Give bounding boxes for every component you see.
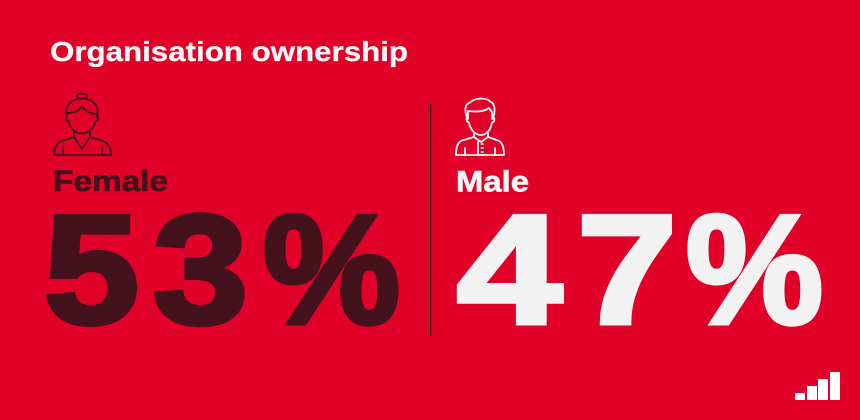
label: male: Male bbox=[456, 166, 529, 198]
value: 47%: % bbox=[686, 183, 823, 356]
label: female: Female bbox=[53, 165, 168, 198]
icon: male person bbox=[456, 99, 504, 155]
value: 47%: 4 bbox=[457, 183, 562, 356]
icon: logo bars bbox=[795, 372, 840, 400]
panel: female bbox=[44, 94, 400, 356]
icon: female person bbox=[54, 94, 111, 155]
title: Organisation ownership bbox=[50, 36, 408, 67]
value: 53%: % bbox=[263, 183, 400, 356]
panel: male bbox=[456, 99, 823, 356]
value: 53%: 5 bbox=[44, 183, 139, 356]
value: 53%: 3 bbox=[153, 183, 248, 356]
value: 47%: 7 bbox=[577, 183, 677, 356]
value: 53% bbox=[44, 183, 400, 356]
divider bbox=[430, 104, 431, 336]
value: 47% bbox=[457, 183, 823, 356]
